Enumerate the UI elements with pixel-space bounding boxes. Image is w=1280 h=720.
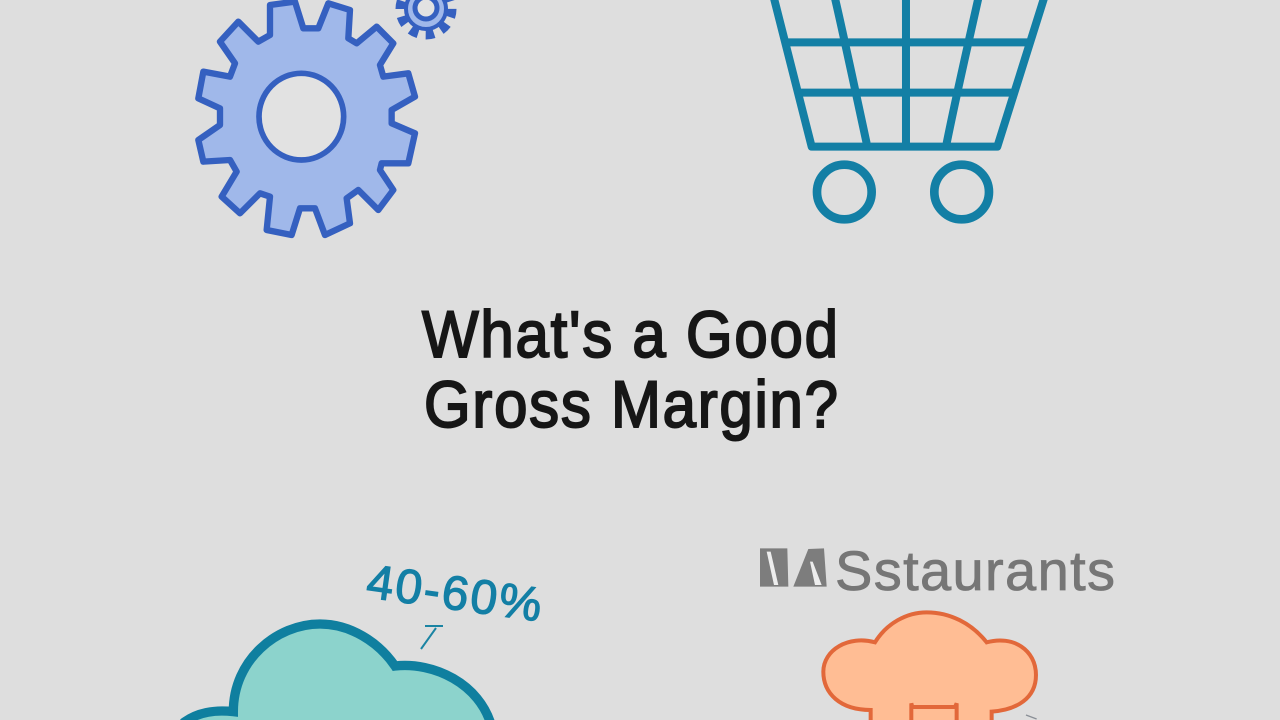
cart wheels: [817, 165, 989, 219]
icon: cloud: [185, 624, 492, 720]
title: Gross Margin?: [424, 368, 838, 442]
wordmark: Sstaurants: [835, 539, 1115, 602]
pointer mark: [421, 626, 443, 649]
label: restaurants: [760, 539, 1115, 602]
label: 40-60%: 40-60%: [363, 555, 545, 632]
icon: shopping cart: [774, 0, 1044, 219]
logo mark: [760, 548, 827, 587]
hat band: [911, 703, 957, 720]
icon: large gear: [198, 2, 415, 235]
icon: small gear: [400, 0, 452, 35]
title: [422, 298, 838, 442]
icon: chef hat: [823, 612, 1037, 720]
title: What's a Good: [422, 298, 838, 372]
small grey tick: [1026, 715, 1037, 719]
gear hole: [259, 73, 344, 160]
cart basket: [774, 0, 1044, 147]
